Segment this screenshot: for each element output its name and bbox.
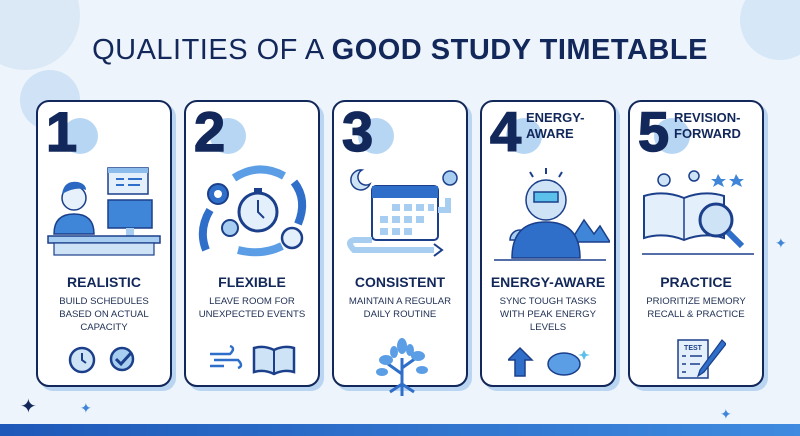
icon: test sheet with pen: TEST (684, 345, 703, 352)
side label: ENERGY- (526, 110, 585, 125)
description (59, 296, 149, 333)
number 2: 2 (194, 100, 225, 163)
icon: student at desk (47, 167, 161, 256)
panel: consistent (332, 100, 468, 387)
description (500, 296, 596, 333)
text: ✦ (720, 406, 732, 422)
panel: realistic (36, 100, 172, 387)
description: PRIORITIZE MEMORY (646, 296, 746, 307)
icon: calendar with routine arrow (347, 169, 458, 257)
side label (674, 110, 741, 141)
icon: book with magnifier (642, 170, 754, 255)
title: QUALITIES OF A GOOD STUDY TIMETABLE (92, 34, 708, 66)
side label (526, 110, 585, 141)
description: CAPACITY (80, 322, 128, 333)
icon: stopwatch with arrows and gears (198, 165, 306, 256)
description: UNEXPECTED EVENTS (199, 309, 305, 320)
icon: test sheet with pen (677, 339, 726, 379)
description: BASED ON ACTUAL (59, 309, 149, 320)
heading: CONSISTENT (355, 274, 445, 290)
number 3: 3 (342, 100, 373, 163)
icon: head with battery (494, 168, 610, 261)
description: SYNC TOUGH TASKS (500, 296, 596, 307)
heading: ENERGY-AWARE (491, 274, 605, 290)
description: MAINTAIN A REGULAR (349, 296, 451, 307)
heading: FLEXIBLE (218, 274, 286, 290)
side label: FORWARD (674, 126, 741, 141)
number 1: 1 (46, 100, 77, 163)
description (646, 296, 746, 320)
heading: PRACTICE (660, 274, 732, 290)
heading: REALISTIC (67, 274, 141, 290)
icon: tree (376, 338, 428, 396)
text: ✦ (80, 400, 92, 416)
description: LEVELS (530, 322, 566, 333)
description: BUILD SCHEDULES (59, 296, 149, 307)
panel: energy-aware (480, 100, 616, 387)
side label: AWARE (526, 126, 574, 141)
decorative sparkles: ✦ (20, 396, 37, 418)
number 5: 5 (638, 100, 669, 163)
icons: wind and book (210, 344, 296, 376)
icons: arrow and brain (508, 347, 590, 377)
decorative circles (0, 0, 80, 70)
description: DAILY ROUTINE (364, 309, 436, 320)
description: WITH PEAK ENERGY (500, 309, 596, 320)
description (349, 296, 451, 320)
panel: flexible (184, 100, 320, 387)
side label: REVISION- (674, 110, 740, 125)
description: RECALL & PRACTICE (647, 309, 745, 320)
description (199, 296, 305, 320)
icons: clock and check (68, 346, 134, 374)
bottom band (0, 424, 800, 436)
text: ✦ (775, 235, 787, 251)
number 4: 4 (490, 100, 521, 163)
panel: practice (628, 100, 764, 387)
description: LEAVE ROOM FOR (209, 296, 295, 307)
